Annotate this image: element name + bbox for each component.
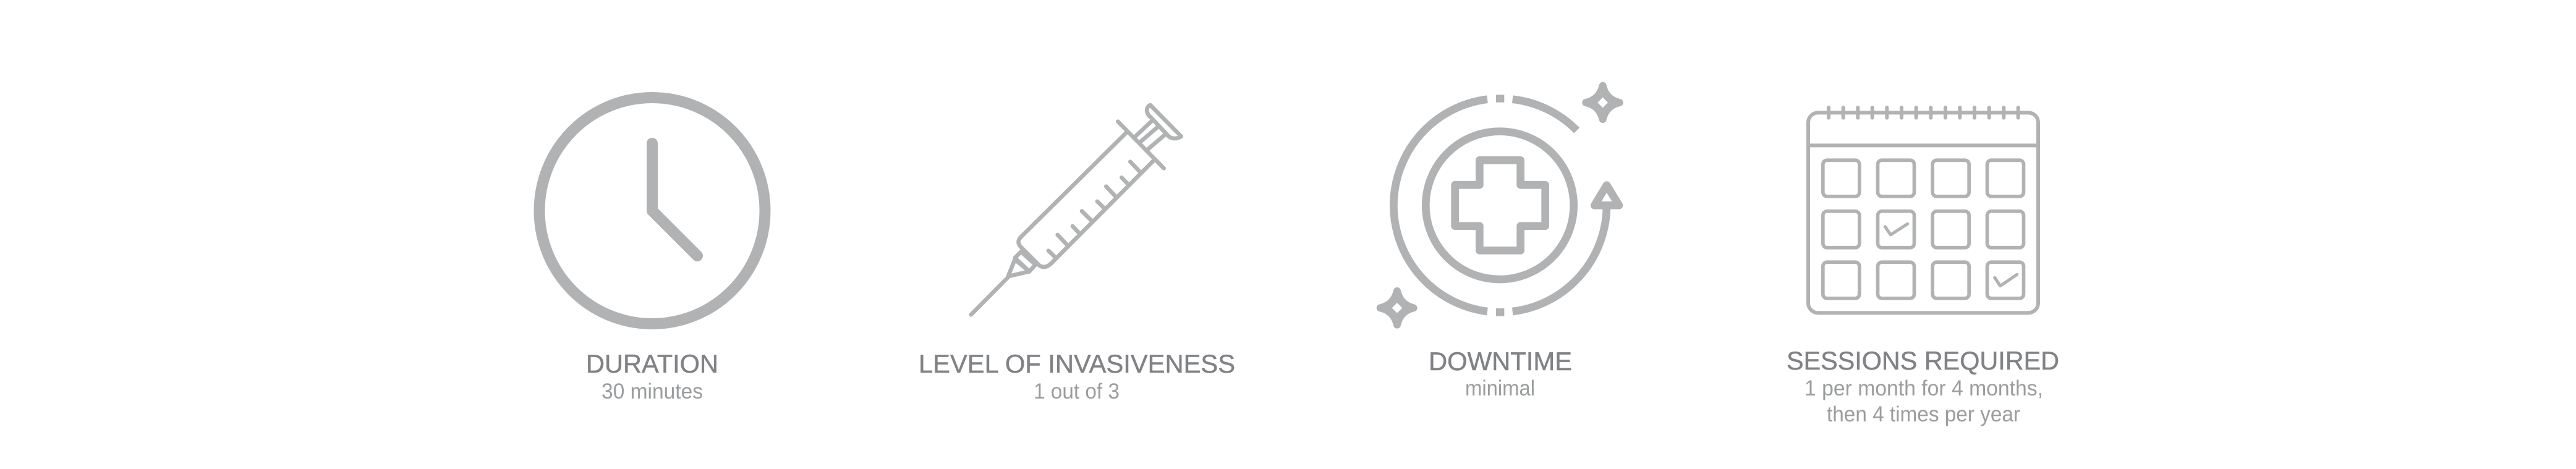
text: sessions value: then 4 times per year bbox=[1827, 402, 2020, 426]
heading: level of invasiveness: LEVEL OF INVASIVENESS bbox=[919, 349, 1235, 378]
icon: medical cross with cycle arrow bbox=[1380, 86, 1620, 325]
icon: clock bbox=[539, 98, 765, 324]
heading: sessions required: SESSIONS REQUIRED bbox=[1787, 346, 2059, 375]
text: sessions value: 1 per month for 4 months, bbox=[1804, 376, 2043, 400]
text: downtime value: minimal bbox=[1465, 376, 1535, 400]
text: duration value: 30 minutes bbox=[601, 379, 703, 404]
panel: duration bbox=[539, 98, 765, 404]
icon: syringe bbox=[971, 105, 1181, 315]
panel: downtime bbox=[1380, 86, 1620, 400]
heading: downtime: DOWNTIME bbox=[1429, 347, 1572, 376]
text: invasiveness value: 1 out of 3 bbox=[1034, 379, 1120, 404]
panel: level of invasiveness bbox=[919, 105, 1235, 404]
panel: sessions required bbox=[1787, 108, 2059, 426]
heading: duration: DURATION bbox=[586, 349, 718, 378]
icon: calendar bbox=[1808, 108, 2038, 313]
